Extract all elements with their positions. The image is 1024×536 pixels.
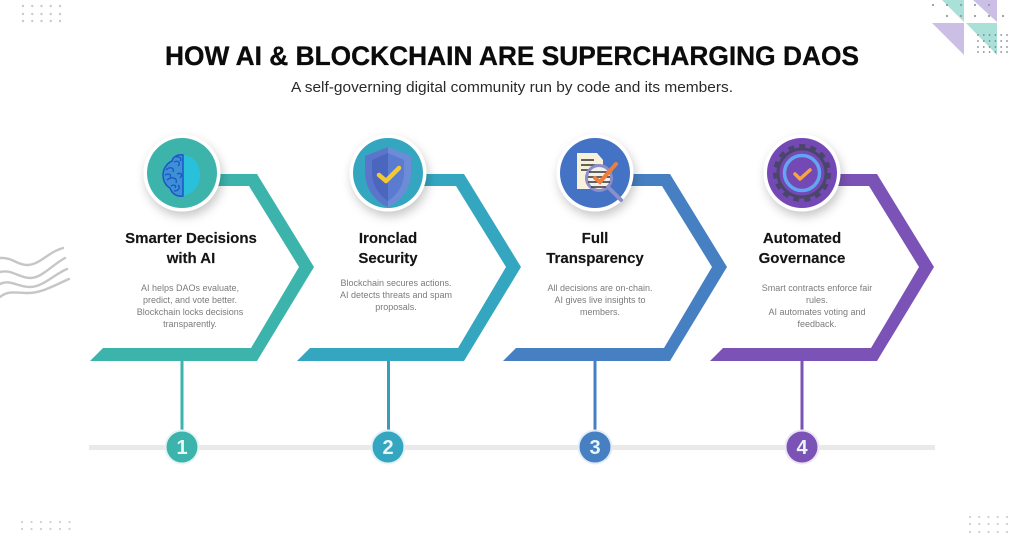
- connector 1: [180, 361, 184, 445]
- heading 1: Smarter Decisions: [125, 230, 257, 247]
- body 2: Blockchain secures actions.: [340, 278, 452, 288]
- title: HOW AI & BLOCKCHAIN ARE SUPERCHARGING DAOS: [165, 41, 859, 71]
- decoration: wavy lines: [0, 248, 69, 297]
- decoration: top-left dots: [23, 6, 61, 21]
- icon: document magnifier: [556, 134, 634, 212]
- heading 3: Full: [582, 230, 608, 247]
- body 1: transparently.: [163, 319, 217, 329]
- heading 3: Transparency: [546, 250, 644, 267]
- heading 4: Governance: [759, 250, 845, 267]
- heading 3: [546, 230, 644, 267]
- subtitle: A self-governing digital community run by code and its members.: [291, 80, 733, 96]
- icon: brain: [144, 134, 220, 212]
- icon: shield: [350, 134, 426, 212]
- decoration: top-right triangles: [932, 0, 1008, 55]
- timeline track: [89, 445, 935, 450]
- body 3: members.: [580, 307, 620, 317]
- connector 2: [387, 361, 390, 445]
- body 2: proposals.: [375, 302, 417, 312]
- heading 1: [125, 230, 257, 267]
- heading 2: Ironclad: [359, 230, 417, 247]
- number badge 1: 1: [176, 437, 188, 459]
- panel: step 3 full transparency: [503, 134, 727, 464]
- body 1: AI helps DAOs evaluate,: [141, 283, 239, 293]
- number badge 2: 2: [382, 437, 394, 459]
- body 1: predict, and vote better.: [143, 295, 237, 305]
- icon: gear with check: [764, 134, 840, 212]
- body 2: AI detects threats and spam: [340, 290, 452, 300]
- panel: step 1 smarter decisions: [90, 134, 314, 464]
- chevron 2: [297, 174, 521, 361]
- body 1: [137, 283, 244, 329]
- heading 1: with AI: [166, 250, 215, 267]
- heading 4: [759, 230, 845, 267]
- number badge 1: [164, 430, 200, 464]
- number badge 3: 3: [589, 437, 601, 459]
- body 3: [547, 283, 653, 317]
- connector 4: [800, 361, 804, 445]
- heading 4: Automated: [763, 230, 841, 247]
- heading 2: [358, 230, 418, 267]
- body 1: Blockchain locks decisions: [137, 307, 244, 317]
- number badge 4: 4: [796, 437, 808, 459]
- number badge 4: [784, 430, 820, 464]
- body 3: AI gives live insights to: [554, 295, 646, 305]
- body 3: All decisions are on-chain.: [547, 283, 653, 293]
- number badge 2: [370, 430, 406, 464]
- panel: step 2 ironclad security: [297, 134, 521, 464]
- decoration: bottom-right dots: [970, 517, 1008, 532]
- body 4: rules.: [806, 295, 828, 305]
- chevron 4: [710, 174, 934, 361]
- connector 3: [594, 361, 596, 445]
- decoration: bottom-left dots: [22, 522, 72, 529]
- heading 2: Security: [358, 250, 418, 267]
- chevron 3: [503, 174, 727, 361]
- body 4: Smart contracts enforce fair: [762, 283, 872, 293]
- body 4: [762, 283, 872, 329]
- body 4: feedback.: [797, 319, 837, 329]
- panel: step 4 automated governance: [710, 134, 934, 464]
- chevron 1: [90, 174, 314, 361]
- number badge 3: [578, 430, 612, 464]
- body 4: AI automates voting and: [768, 307, 866, 317]
- body 2: [340, 278, 452, 312]
